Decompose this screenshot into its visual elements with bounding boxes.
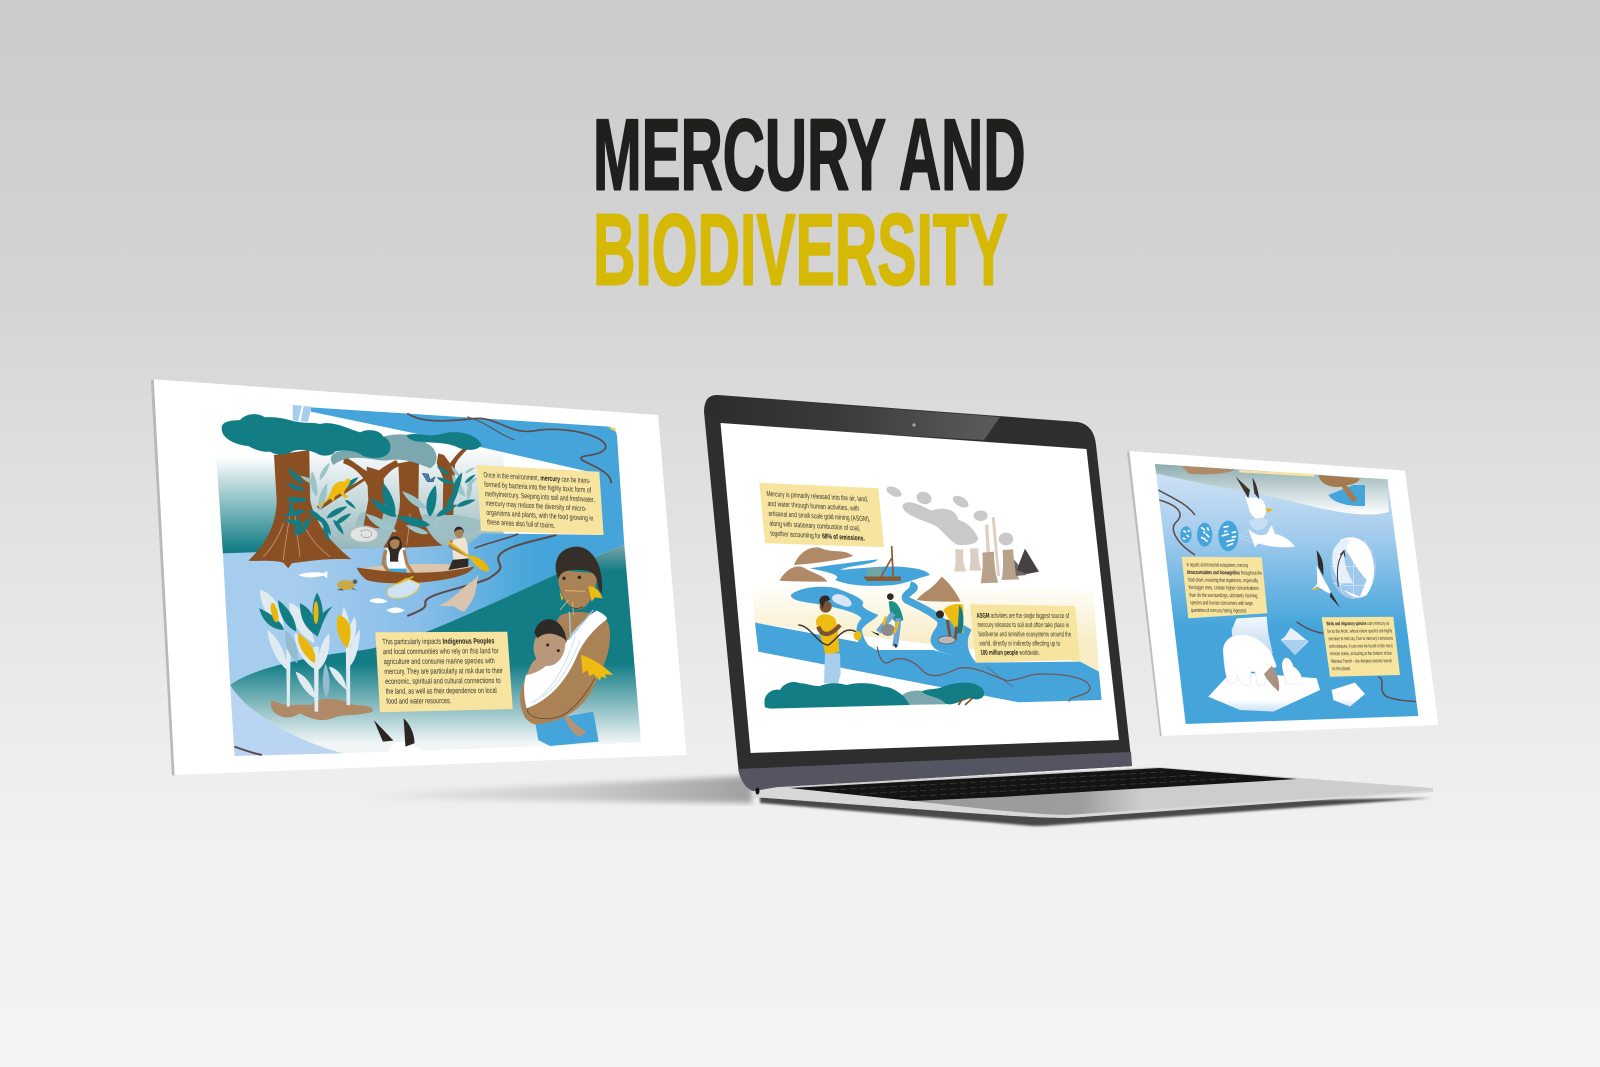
- text box: bioaccumulation: In aquatic and terrestrial ecosystems, mercury: [1186, 562, 1249, 569]
- icon: butterfly: [422, 473, 435, 482]
- laptop lid: [704, 395, 1132, 791]
- laptop shadow: [760, 795, 1432, 826]
- sand gradient: [752, 583, 1099, 672]
- icon: snake on rock: [350, 526, 378, 542]
- text box: indigenous peoples: agriculture and consume marine species with: [383, 656, 495, 666]
- text box: ASGM activities: world, directly or indirectly affecting up to: [979, 640, 1061, 648]
- mother's head: [556, 547, 602, 615]
- panel: left print, indigenous peoples: [151, 379, 686, 776]
- icon: power station: [954, 517, 1039, 583]
- canoe: [357, 527, 489, 598]
- text box: birds and migratory species: Mariana Trench – the deepest oceanic trench: [1331, 658, 1393, 665]
- trackpad area: [913, 779, 1433, 815]
- text box: mercury in the environment: mercury may reduce the diversity of micro-: [485, 499, 587, 513]
- text box: indigenous peoples: mercury. They are particularly at risk due to their: [384, 666, 503, 676]
- text box: ASGM activities: ASGM activities are the single biggest source of: [976, 613, 1070, 620]
- laptop screen: [720, 423, 1119, 753]
- title: [593, 100, 1026, 307]
- screen artwork: gold mining: [752, 484, 1102, 709]
- arm crease: [528, 678, 595, 719]
- text box: bioaccumulation: food chain, meaning that organisms, especially: [1188, 578, 1258, 584]
- man with tool: [798, 595, 862, 687]
- plankton and small fish circles: [1180, 521, 1253, 551]
- icon: shark: [1248, 525, 1295, 547]
- icon: fish: [298, 571, 327, 578]
- landscape background: [216, 405, 641, 756]
- title line: Mercury and: MERCURY AND: [593, 100, 1026, 212]
- icon: bird wings: [374, 718, 420, 753]
- text box: indigenous peoples: food and water resources.: [386, 696, 452, 706]
- icon: albatross in flight: [1312, 550, 1340, 608]
- text box: bioaccumulation: species and human consumers with large: [1190, 600, 1253, 607]
- person with paddle: [448, 527, 489, 572]
- text box: indigenous peoples: This particularly impacts Indigenous Peoples: [382, 636, 495, 646]
- ponds: [832, 594, 852, 607]
- icon: small fish: [369, 598, 405, 613]
- text box: primary releases: along with stationary combustion of coal,: [769, 519, 861, 533]
- icon: turtle: [337, 579, 357, 591]
- ice floe: [1208, 672, 1320, 712]
- text box: birds and migratory species: [1322, 617, 1400, 677]
- port: [756, 788, 760, 794]
- corn plants: [259, 590, 373, 720]
- trees: [248, 447, 467, 568]
- woman panning right: [936, 604, 963, 644]
- mounds: [779, 547, 961, 602]
- print sheet: [1127, 451, 1438, 736]
- text box: mercury in the environment: formed by bacteria into the highly toxic form of: [484, 480, 592, 495]
- text box: primary releases: Mercury is primarily released into the air, land,: [766, 489, 869, 503]
- skirt: [535, 712, 599, 746]
- icon: polar bears: [1223, 635, 1303, 692]
- icon: monkey: [317, 478, 350, 506]
- text box: indigenous peoples: economic, spiritual and cultural connections to: [385, 676, 501, 686]
- text box: bioaccumulation: than do the surroundings, ultimately harming: [1189, 593, 1258, 600]
- text box: mercury in the environment: methylmercury. Seeping into soil and freshwater,: [485, 489, 595, 504]
- icon: mining rig: [865, 546, 900, 580]
- text box: ASGM activities: 100 million people worldwide.: [980, 650, 1040, 657]
- text box: primary releases: [759, 483, 884, 547]
- icon: gannet diving: [1236, 477, 1273, 530]
- text box: bioaccumulation: bioaccumulates and biomagnifies throughout the: [1187, 570, 1262, 577]
- text box: birds and migratory species: on the planet.: [1332, 666, 1351, 672]
- text box: mercury in the environment: [476, 465, 604, 535]
- text box: mercury in the environment: organisms and plants, with the food growing in: [486, 508, 594, 523]
- lid hinge band: [738, 752, 1132, 791]
- mother and child: [520, 547, 613, 746]
- text box: primary releases: together accounting for 68% of emissions.: [770, 529, 865, 543]
- panel: right print, food chain and arctic: [1127, 451, 1438, 736]
- mother's body: [520, 612, 610, 724]
- river line: [877, 647, 1090, 702]
- text box: birds and migratory species: remote areas, including at the bottom of the: [1330, 651, 1392, 657]
- cast shadow on the floor: [360, 776, 752, 803]
- text box: birds and migratory species: Birds and migratory species carry mercury as: [1326, 621, 1390, 627]
- canopy: [222, 414, 482, 468]
- lagoons and streams: [791, 559, 977, 663]
- pale mound behind trees: [355, 510, 480, 548]
- icon: smoke: [885, 484, 1013, 545]
- pale foliage: [299, 461, 478, 537]
- bushes: [764, 682, 984, 709]
- text box: ASGM activities: [970, 604, 1080, 663]
- icon: river dolphin: [438, 574, 479, 612]
- text box: indigenous peoples: [375, 632, 513, 712]
- fragments of the previous scene: [1182, 466, 1365, 506]
- text box: birds and migratory species: far as the Arctic, whose native species are highly: [1327, 628, 1393, 635]
- keyboard: [790, 768, 1297, 801]
- woman panning left: [871, 593, 903, 649]
- sling: [524, 611, 607, 708]
- laptop base: [753, 767, 1433, 818]
- baby's head: [530, 619, 568, 668]
- laptop: [704, 395, 1433, 826]
- text box: mercury in the environment: Once in the environment, mercury can be trans-: [483, 470, 591, 485]
- ocean artwork: [1155, 464, 1418, 724]
- text box: indigenous peoples: the land, as well as their dependence on local: [385, 686, 497, 696]
- title line: Biodiversity: BIODIVERSITY: [593, 195, 1008, 307]
- river lines: [1158, 490, 1416, 702]
- text box: ASGM activities: biodiverse and sensitive ecosystems around the: [978, 631, 1072, 638]
- river wildlife and corn field: [259, 574, 479, 753]
- text box: bioaccumulation: quantities of mercury being ingested.: [1191, 608, 1247, 615]
- icon: globe: [1331, 534, 1376, 599]
- foliage: [283, 465, 476, 542]
- text box: bioaccumulation: the bigger ones, contain higher concentrations: [1188, 585, 1259, 592]
- rainforest trees and canoe: [222, 414, 489, 598]
- text box: indigenous peoples: and local communities who rely on this land for: [383, 646, 499, 656]
- feather earrings and arm band: [559, 586, 613, 681]
- text box: primary releases: and water through human activities, with: [767, 499, 860, 513]
- river: [755, 623, 1102, 702]
- icon: icebergs: [1232, 617, 1308, 655]
- text box: primary releases: artisanal and small scale gold mining (ASGM),: [768, 509, 871, 523]
- lid highlight: [706, 396, 1000, 440]
- text box: mercury in the environment: these areas also full of toxins.: [487, 517, 555, 530]
- person with net: [383, 536, 414, 583]
- text box: ASGM activities: mercury releases to soil and often take place in: [977, 622, 1070, 629]
- text box: birds and migratory species: sensitive to mercury. Due to mercury's emissions: [1328, 636, 1394, 642]
- text box: birds and migratory species: and releases, it can now be found in the most: [1329, 643, 1393, 650]
- baby's leg: [563, 712, 586, 736]
- front lip: [753, 786, 1433, 818]
- root streaks: [263, 513, 410, 560]
- camera: [912, 423, 916, 427]
- icon: small ice floe: [1332, 683, 1365, 707]
- print sheet: [151, 379, 686, 776]
- text box: bioaccumulation: [1182, 557, 1267, 618]
- baby's body: [527, 642, 570, 677]
